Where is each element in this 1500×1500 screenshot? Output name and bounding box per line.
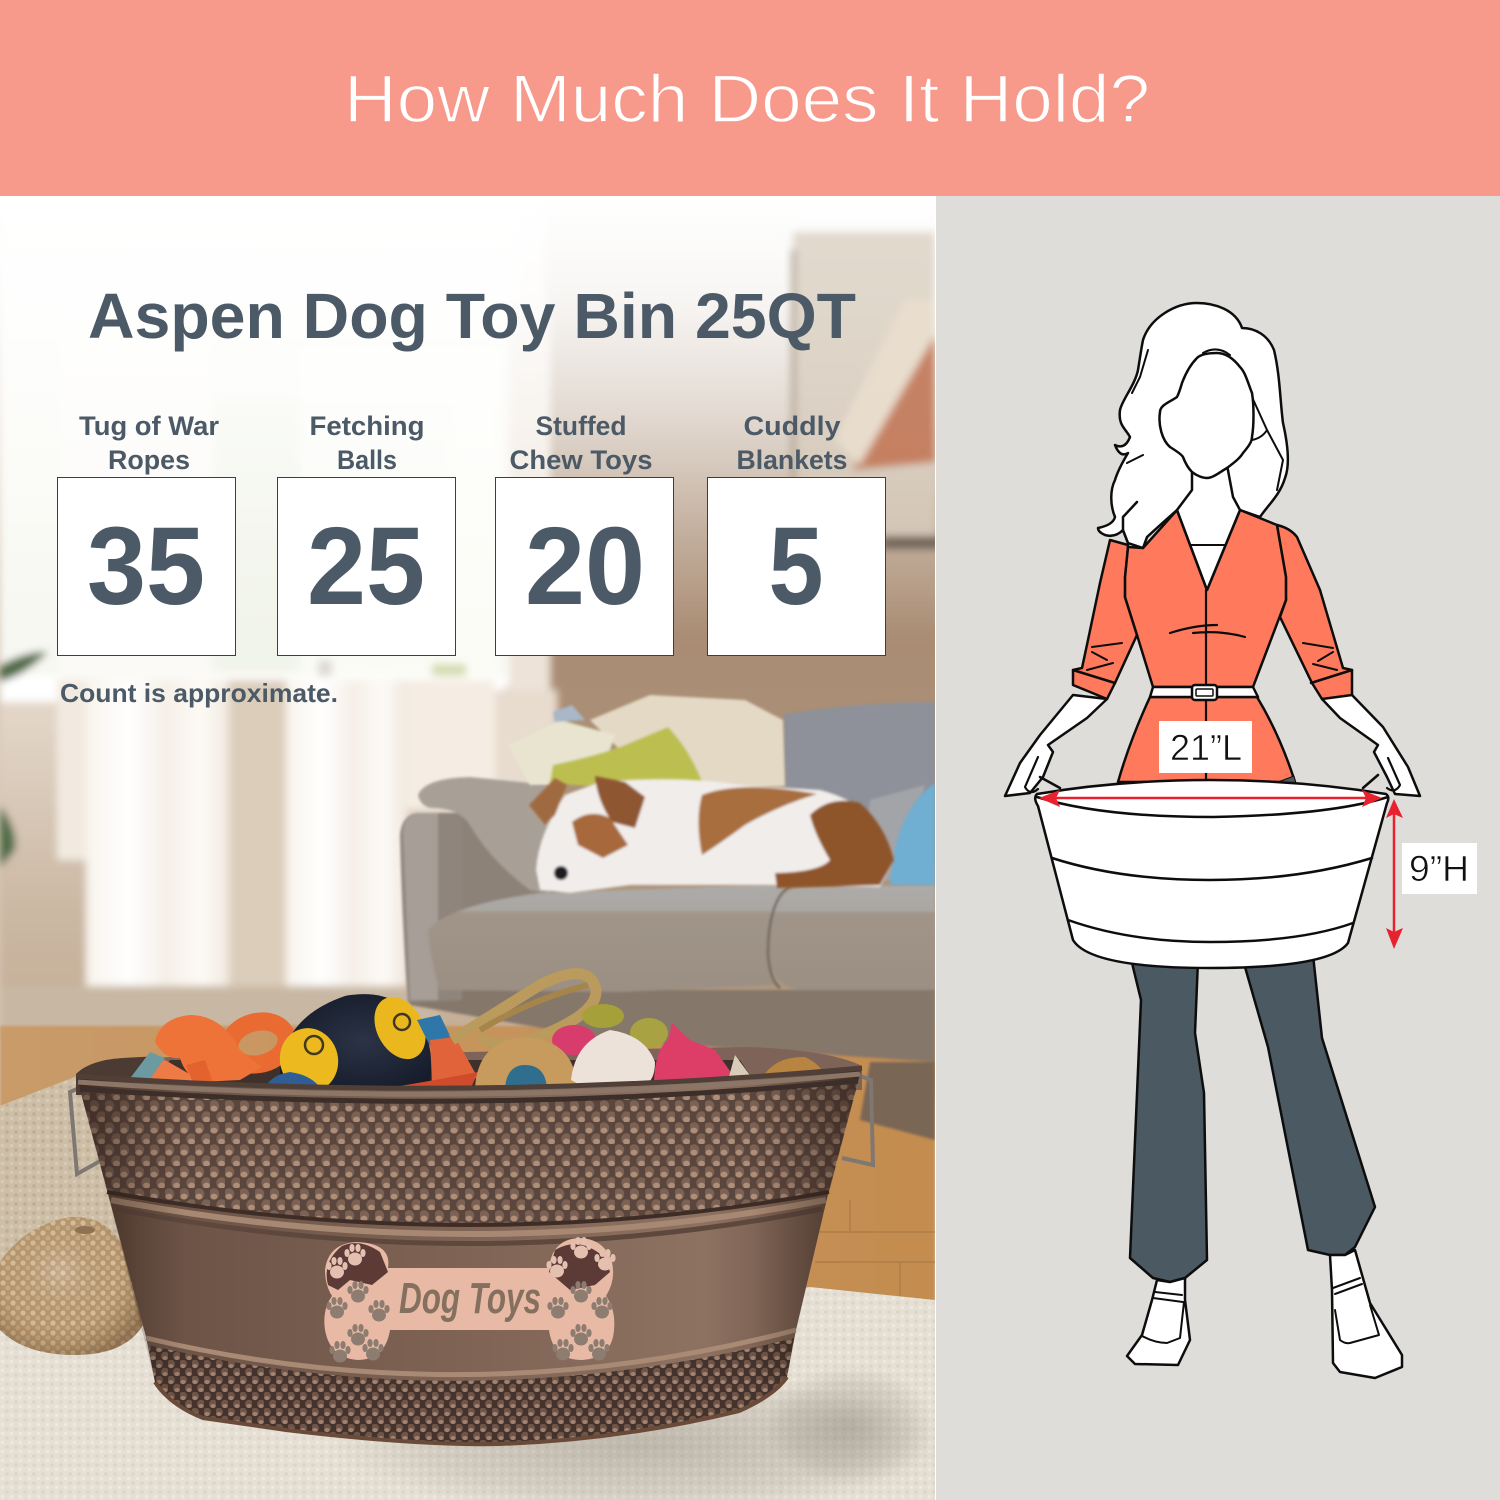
height label: 9”H xyxy=(1409,848,1469,889)
bin handles xyxy=(70,1075,873,1174)
stat: ropes: Ropes xyxy=(108,445,190,475)
stat: blankets: Blankets xyxy=(736,445,848,475)
blue knots xyxy=(268,1072,318,1085)
dog xyxy=(529,776,894,893)
face xyxy=(1159,353,1254,478)
stat: blankets: 5 xyxy=(768,505,824,628)
room background xyxy=(0,304,935,1092)
back cushions xyxy=(783,701,935,816)
rug back xyxy=(0,1075,935,1500)
blouse details xyxy=(1125,525,1286,687)
sleeves xyxy=(1073,525,1352,699)
stat: balls: Fetching xyxy=(310,411,424,441)
baseboard xyxy=(0,986,440,1028)
tan chew toy xyxy=(765,1057,821,1074)
stat: chew toys: 20 xyxy=(525,505,645,628)
skirt xyxy=(1118,697,1295,782)
trousers xyxy=(1130,955,1375,1282)
blanket and pillows xyxy=(508,695,935,885)
stat: balls: Balls xyxy=(337,445,397,475)
armrest xyxy=(400,813,462,1003)
panel: product photo xyxy=(0,196,950,1500)
rug shadow xyxy=(370,1393,904,1500)
bone shape xyxy=(324,1238,614,1360)
footnote: Count is approximate. xyxy=(60,678,338,708)
stat: balls xyxy=(278,411,456,656)
hair line details xyxy=(1127,349,1283,490)
stat: blankets: Cuddly xyxy=(744,411,840,441)
stat: blankets xyxy=(708,411,886,656)
sofa back xyxy=(460,816,559,911)
stat: chew toys: Chew Toys xyxy=(510,445,652,475)
sofa xyxy=(400,702,935,1140)
belt xyxy=(1150,687,1258,697)
sofa base xyxy=(410,990,935,1062)
bin xyxy=(76,1066,862,1444)
small toys xyxy=(582,1004,624,1028)
hammered lower band xyxy=(148,1338,794,1444)
height label xyxy=(1402,843,1477,894)
arms xyxy=(1005,695,1420,796)
blouse torso xyxy=(1125,510,1286,687)
tub xyxy=(1035,780,1388,968)
plant xyxy=(0,652,48,868)
bin body xyxy=(88,1070,861,1382)
dark paw patches xyxy=(327,1243,388,1290)
seat cushions xyxy=(428,884,790,992)
stat: ropes: 35 xyxy=(87,505,205,628)
rim xyxy=(76,1068,862,1101)
orange ring toy xyxy=(125,1015,291,1088)
sheer curtains xyxy=(53,656,496,992)
tan donut xyxy=(475,1037,577,1088)
plush toy xyxy=(571,1030,655,1085)
stat: ropes: Tug of War xyxy=(79,411,219,441)
toys xyxy=(125,974,825,1098)
neck and chest xyxy=(1177,465,1240,590)
title: How Much Does It Hold? xyxy=(344,61,1150,137)
length label xyxy=(1159,721,1252,773)
stat: balls: 25 xyxy=(307,505,425,628)
hair xyxy=(1098,303,1288,548)
pink toy xyxy=(654,1023,735,1082)
hair lock over shoulder xyxy=(1123,480,1177,548)
bin interior xyxy=(76,1047,862,1090)
back wall xyxy=(0,700,529,1027)
product heading: Aspen Dog Toy Bin 25QT xyxy=(88,280,856,352)
header banner xyxy=(0,0,1500,196)
figure: woman holding bin xyxy=(1005,303,1420,1378)
shoes xyxy=(1127,1250,1402,1378)
black and yellow ball xyxy=(280,994,432,1086)
bone text: Dog Toys xyxy=(399,1274,541,1323)
length label: 21”L xyxy=(1170,727,1242,768)
stat: chew toys: Stuffed xyxy=(536,411,626,441)
height arrow xyxy=(1386,799,1403,949)
stat: ropes xyxy=(58,411,236,656)
pouf xyxy=(0,1217,143,1355)
arm pillow xyxy=(418,777,550,893)
fade overlay xyxy=(0,196,935,636)
stat: chew toys xyxy=(496,411,674,656)
belt buckle xyxy=(1192,685,1217,700)
mid rib xyxy=(107,1192,829,1225)
panel: dimensions background xyxy=(936,196,1500,1500)
hammered upper band xyxy=(80,1082,858,1225)
bone label xyxy=(324,1237,616,1362)
rope toy xyxy=(452,974,596,1044)
floor xyxy=(0,1024,935,1300)
wall art xyxy=(791,232,942,549)
window glow xyxy=(0,385,513,687)
bin shading xyxy=(78,1070,861,1391)
width arrow xyxy=(1039,790,1382,807)
